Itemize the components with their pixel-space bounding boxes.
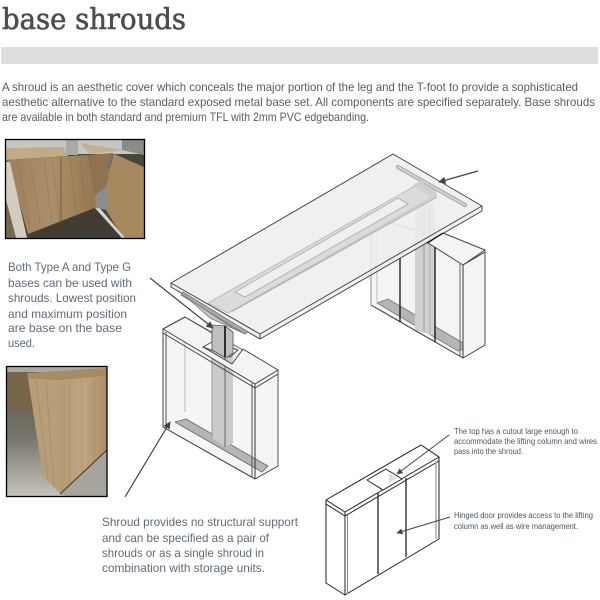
arrow: to leg (150, 278, 213, 328)
left note: base types: shrouds. Lowest position (8, 291, 136, 305)
illustration: desktop with frame (171, 154, 482, 339)
bottom note: structural support: and can be specified as a pair of (102, 531, 270, 545)
intro text: A shroud is an aesthetic cover which conceals the major portion of the leg and the T-foot to provide a sophisticated (2, 80, 578, 94)
callout: top cutout (454, 426, 597, 456)
callout: hinged door: column as well as wire management. (454, 521, 578, 531)
arrow: to cutout (397, 435, 449, 474)
callout: top cutout: pass into the shroud. (454, 446, 523, 456)
left note: base types (8, 260, 136, 350)
arrow: to desktop edge (439, 171, 478, 182)
bottom note: structural support (102, 515, 299, 575)
left note: base types: and maximum position (8, 307, 127, 321)
illustration: right rear shroud (371, 203, 485, 358)
intro text: are available in both standard and premium TFL with 2mm PVC edgebanding. (2, 110, 369, 124)
grey header band (1, 47, 598, 64)
photo: shroud corner (6, 366, 107, 496)
illustration: front shroud with lifting column (163, 317, 278, 479)
bottom note: structural support: combination with storage units. (102, 561, 265, 575)
left note: base types: Both Type A and Type G (8, 260, 131, 274)
title: base shrouds (2, 2, 186, 36)
left note: base types: bases can be used with (8, 276, 132, 290)
callout: top cutout: The top has a cutout large enough to (454, 426, 578, 436)
bottom note: structural support: shrouds or as a single shroud in (102, 546, 264, 560)
left note: base types: are base on the base (8, 321, 122, 335)
bottom note: structural support: Shroud provides no structural support (102, 515, 299, 529)
callout: hinged door (454, 510, 593, 531)
illustration: closed shroud detail (326, 445, 439, 595)
arrow: to hinged door (397, 517, 450, 533)
intro text (2, 80, 595, 124)
photo: shroud with cutout (5, 139, 145, 239)
arrow: to shroud base (125, 422, 170, 497)
left note: base types: used. (8, 336, 35, 350)
